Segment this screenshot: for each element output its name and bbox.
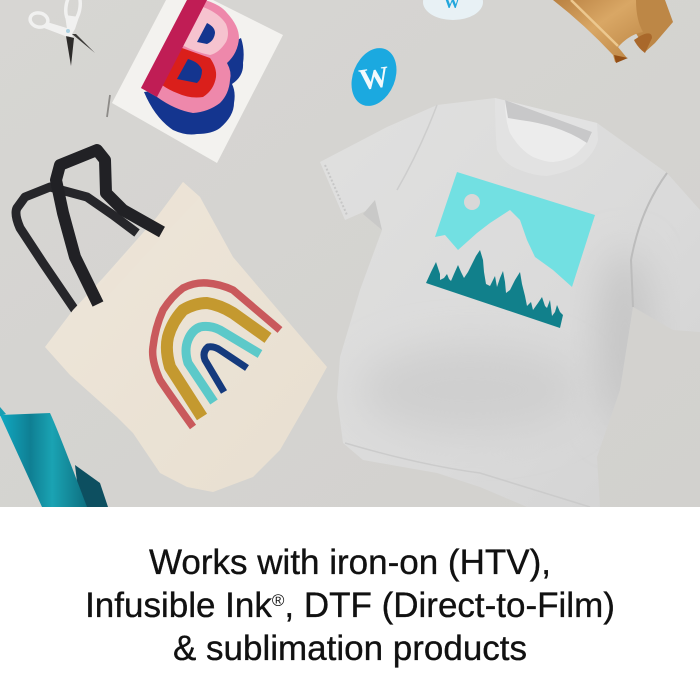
zipper (107, 95, 110, 117)
trees (426, 250, 563, 328)
blue sticker W: W (357, 60, 391, 97)
product photo scene (0, 0, 700, 507)
gold glitter sheet (553, 0, 673, 63)
B counters (197, 23, 215, 44)
teal foil sheet (0, 407, 108, 507)
pouch with letter B (107, 0, 283, 163)
underarm fold (363, 200, 382, 230)
tote bag (16, 150, 327, 492)
rainbow design (153, 283, 280, 427)
B shadow (144, 38, 244, 134)
B pale top (182, 7, 228, 55)
shirt shading (376, 262, 653, 424)
caption text: Works with iron-on (HTV), (149, 543, 551, 582)
moon (464, 194, 480, 210)
bag body (45, 182, 327, 492)
background (0, 0, 700, 507)
blue sticker W (343, 41, 405, 113)
sleeve seams (397, 105, 437, 190)
front handle (56, 150, 162, 304)
caption text: Infusible Ink®, DTF (Direct-to-Film) (85, 586, 615, 625)
caption text (85, 543, 615, 668)
B red (162, 48, 216, 98)
back handle (16, 187, 137, 310)
t-shirt (320, 98, 700, 507)
sky (435, 172, 595, 287)
B pink (141, 0, 239, 113)
bag hem (95, 182, 200, 300)
collar (495, 98, 598, 176)
mountain scene design (426, 172, 595, 328)
caption text: & sublimation products (173, 629, 527, 668)
B stem (141, 0, 207, 97)
icon: scissors (28, 0, 95, 66)
small blue sticker, top (423, 0, 483, 20)
